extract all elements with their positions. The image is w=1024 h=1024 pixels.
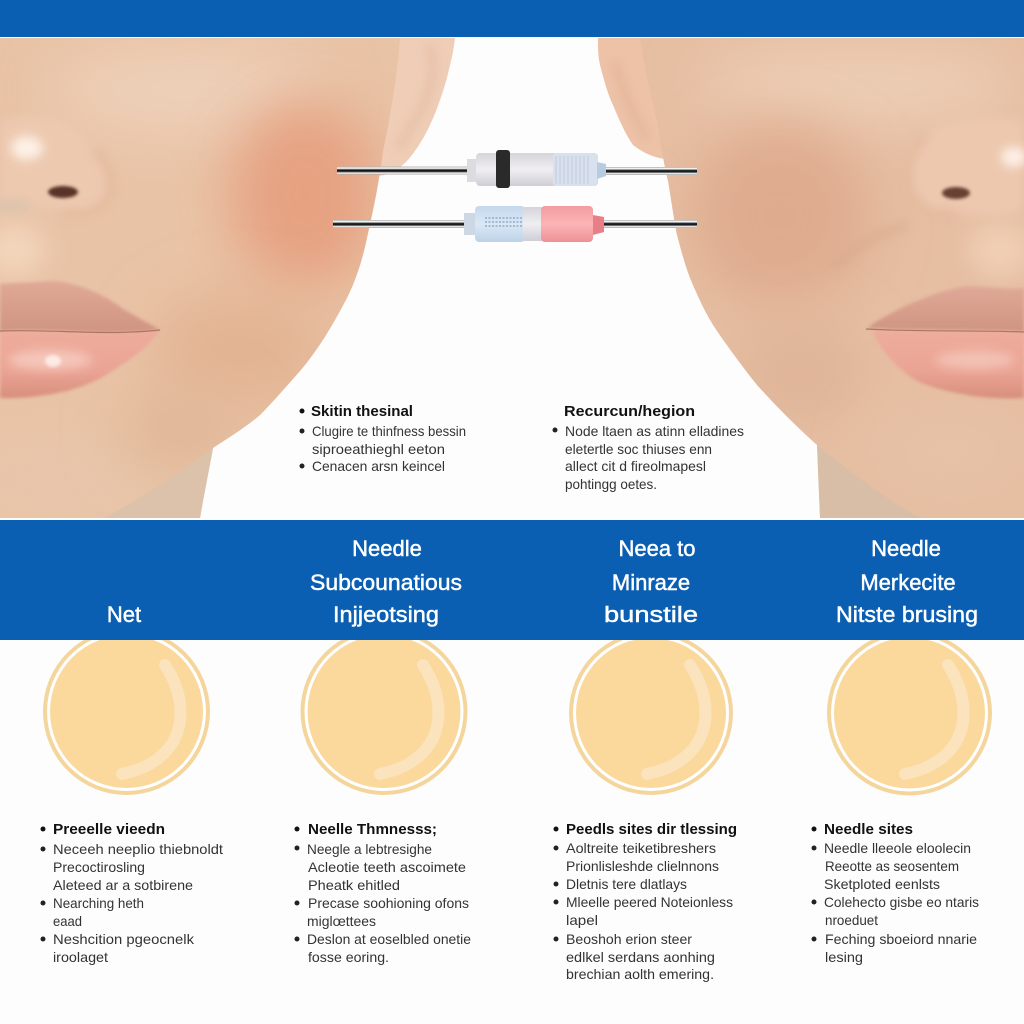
icon: skin circle 1 [43,628,210,795]
left nose [4,120,104,207]
text block: column 4 list: Needle lleeole eloolecin [824,840,971,856]
text block: column 2 list: fosse eoring. [308,949,389,965]
text block: column 1 list: iroolaget [53,949,108,965]
heading: column 1: Net [107,602,141,627]
text block: column 2 list: Pheatk ehitled [308,877,400,893]
text block: column 4 list: nroeduet [825,912,878,928]
text block: column 3 list: Aoltreite teiketibreshers [566,840,716,856]
text block: column 3 list: Beoshoh erion steer [566,931,692,947]
text block: column 2 list: Acleotie teeth ascoimete [308,859,466,875]
icon: skin circle 3 [569,631,733,795]
heading: column 3: bunstile [604,602,698,627]
blue heading band [0,520,1024,640]
heading: column 2 [310,536,462,627]
text block: column 1 list: Neshcition pgeocnelk [53,931,195,947]
text block: column 3 list: brechian aolth emering. [566,966,714,982]
text block: upper left notes [300,403,466,474]
left ear [378,38,455,176]
syringe: bottom, blue and pink [333,206,697,242]
heading: column 4: Nitste brusing [836,602,978,627]
text block: column 4 list: Colehecto gisbe eo ntaris [824,894,979,910]
text block: upper right notes: eletertle soc thiuses enn [565,441,712,457]
text block: column 2 list [294,821,471,965]
text block: upper right notes: Recurcun/hegion [564,403,695,420]
photo: left face [0,38,460,520]
text block: column 1 list: Nearching heth [53,895,144,911]
heading: column 3: Neea to [618,536,696,561]
left neck [100,448,213,520]
heading: column 2: Needle [352,536,422,561]
text block: upper left notes: Skitin thesinal [311,403,413,420]
text block: upper left notes: Clugire te thinfness bessin [312,423,466,439]
text block: column 2 list: Deslon at eoselbled onetie [307,931,471,947]
icon: skin circle 4 [827,630,992,796]
text block: column 1 list: Aleteed ar a sotbirene [53,877,193,893]
text block: upper left notes: siproeathieghl eeton [312,441,445,457]
text block: column 1 list: Precoctirosling [53,859,145,875]
text block: column 1 list: eaad [53,913,82,929]
text block: column 3 list: lapel [566,912,598,928]
heading: column 4: Merkecite [860,570,956,595]
text block: column 3 list: edlkel serdans aonhing [566,949,715,965]
heading: column 2: Subcounatious [310,570,462,595]
text block: column 4 list: Reeotte as seosentem [825,858,959,874]
text block: upper left notes: Cenacen arsn keincel [312,458,445,474]
heading: column 4: Needle [871,536,941,561]
right nasolabial shade [832,225,908,268]
text block: column 3 list: Mleelle peered Noteionless [566,894,733,910]
right nose [912,123,1022,214]
text block: column 2 list: miglœttees [307,913,376,929]
text block: column 1 list [40,821,223,965]
text block: upper right notes: pohtingg oetes. [565,476,657,492]
text block: column 3 list: Dletnis tere dlatlays [566,876,687,892]
heading: column 3 [604,536,698,627]
text block: column 3 list: Peedls sites dir tlessing [566,821,737,838]
text block: column 3 list [554,821,737,982]
text block: column 2 list: Neelle Thmnesss; [308,821,437,838]
heading: column 3: Minraze [612,570,690,595]
text block: column 4 list: lesing [825,949,863,965]
text block: column 2 list: Precase soohioning ofons [308,895,469,911]
text block: upper right notes [552,403,744,492]
text block: column 2 list: Neegle a lebtresighe [307,841,432,857]
text block: column 1 list: Preeelle vieedn [53,821,165,838]
heading: column 2: Injjeotsing [333,602,439,627]
top blue bar [0,0,1024,37]
text block: column 4 list: Sketploted eenlsts [824,876,940,892]
text block: column 1 list: Neceeh neeplio thiebnoldt [53,841,223,857]
right ear [598,38,664,159]
text block: column 4 list: Needle sites [824,821,913,838]
text block: upper right notes: allect cit d fireolmapesl [565,458,706,474]
icon: skin circle 2 [300,628,468,795]
photo: right face [598,38,1024,520]
heading: column 4 [836,536,978,627]
text block: upper right notes: Node ltaen as atinn elladines [565,423,744,439]
syringe: top, grey with black band [337,150,697,188]
text block: column 4 list [812,821,979,965]
text block: column 4 list: Feching sboeiord nnarie [825,931,977,947]
right neck [817,445,923,520]
text block: column 3 list: Prionlisleshde clielnnons [566,858,719,874]
